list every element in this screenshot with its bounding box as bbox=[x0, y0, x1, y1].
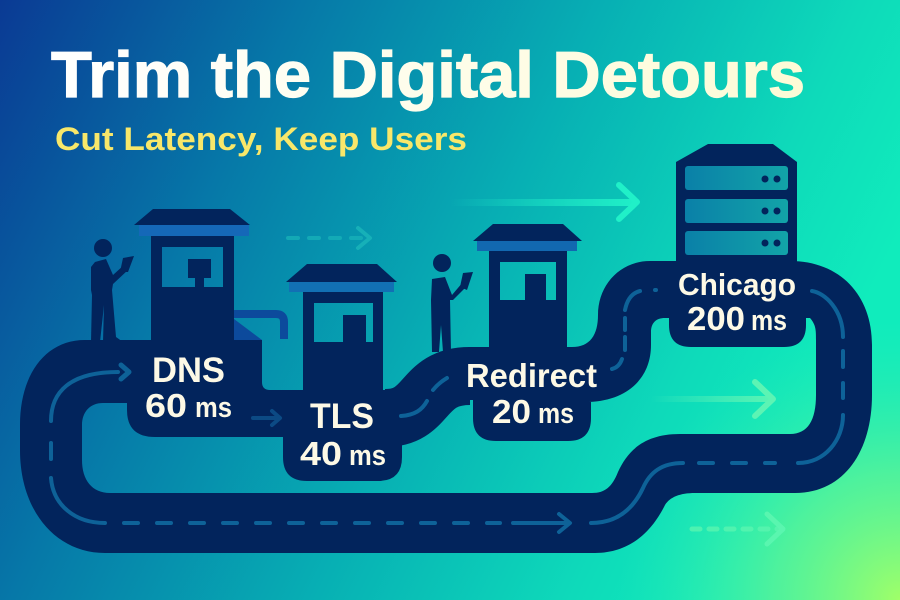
label: Chicago 200 ms: ms bbox=[751, 305, 787, 337]
panel: DNS base bbox=[120, 340, 390, 437]
label: Redirect 20 ms: 20 bbox=[492, 393, 531, 430]
label: Chicago 200 ms: 200 bbox=[687, 300, 745, 337]
label: Chicago 200 ms: Chicago bbox=[678, 267, 796, 302]
arrow: dashed upper bbox=[288, 228, 370, 248]
label: DNS 60 ms: DNS bbox=[152, 351, 225, 390]
icon: connector pipe bbox=[234, 314, 284, 340]
panel: Redirect base bbox=[468, 347, 591, 441]
panel: TLS base bbox=[283, 400, 402, 481]
icon: DNS booth bbox=[134, 209, 250, 342]
label: DNS 60 ms bbox=[145, 351, 232, 424]
panel: Chicago base bbox=[669, 280, 806, 347]
icon: Redirect booth bbox=[473, 224, 582, 349]
title: Trim the Digital Detours bbox=[51, 38, 805, 111]
icon: person reading by Redirect bbox=[431, 254, 473, 352]
subtitle: Cut Latency, Keep Users bbox=[55, 121, 467, 157]
icon: Chicago server bbox=[676, 144, 797, 266]
icon: person reading by DNS bbox=[91, 239, 134, 342]
road bbox=[20, 261, 872, 553]
label: Redirect 20 ms: ms bbox=[538, 398, 574, 430]
label: TLS 40 ms bbox=[300, 397, 386, 472]
label: TLS 40 ms: ms bbox=[349, 440, 386, 472]
label: Redirect 20 ms bbox=[466, 357, 597, 430]
arrow: middle right bbox=[650, 382, 773, 416]
arrow: dashed lower right bbox=[692, 514, 783, 544]
label: TLS 40 ms: TLS bbox=[310, 397, 374, 436]
icon: TLS booth bbox=[286, 264, 397, 392]
label: DNS 60 ms: 60 bbox=[145, 387, 187, 424]
arrow: long solid bbox=[450, 185, 637, 219]
label: Redirect 20 ms: Redirect bbox=[466, 357, 597, 394]
label: TLS 40 ms: 40 bbox=[300, 435, 342, 472]
road lane markings bbox=[51, 290, 843, 532]
label: Chicago 200 ms bbox=[678, 267, 796, 337]
label: DNS 60 ms: ms bbox=[195, 392, 232, 424]
